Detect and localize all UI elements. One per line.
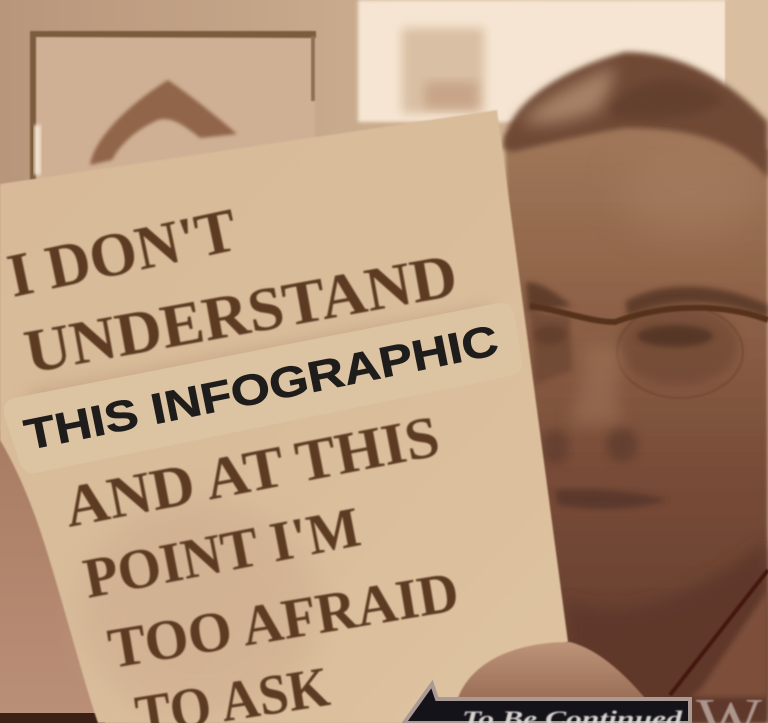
man	[503, 52, 768, 723]
nose bridge	[570, 345, 622, 425]
hair dark side	[612, 80, 725, 119]
mouth	[555, 489, 668, 509]
right eye	[637, 325, 713, 347]
to be continued banner	[404, 684, 762, 723]
window	[358, 0, 768, 130]
arrow body	[404, 684, 690, 723]
hair light side	[520, 66, 615, 124]
hand thumb	[458, 642, 645, 698]
printed text: TOO AFRAID	[104, 560, 463, 681]
forehead highlight	[620, 145, 760, 235]
paper sheet	[0, 110, 568, 723]
hair	[503, 52, 768, 178]
microphone cord	[670, 570, 768, 695]
hair mass	[503, 52, 768, 178]
left lens	[530, 312, 572, 385]
paper sign	[0, 110, 568, 723]
left nostril shadow	[541, 429, 569, 465]
caption text: THIS INFOGRAPHIC	[20, 317, 502, 460]
neck shadow	[565, 540, 768, 723]
printed text: I DON'T	[2, 196, 243, 311]
printed text: UNDERSTAND	[19, 242, 462, 387]
neck lit side	[690, 590, 768, 697]
paper lower shading	[80, 500, 320, 720]
right nostril shadow	[606, 428, 638, 462]
left eye	[534, 325, 566, 345]
paper shading	[25, 305, 495, 420]
face	[505, 109, 768, 723]
caption strip	[4, 303, 522, 473]
framed picture	[30, 31, 316, 185]
glasses frame	[530, 306, 768, 398]
printed text: AND AT THIS	[59, 402, 444, 540]
printed text: POINT I'M	[78, 495, 365, 611]
printed text	[2, 196, 463, 723]
right lens	[618, 305, 738, 385]
left eyebrow	[526, 282, 572, 312]
right eyebrow	[625, 287, 768, 318]
